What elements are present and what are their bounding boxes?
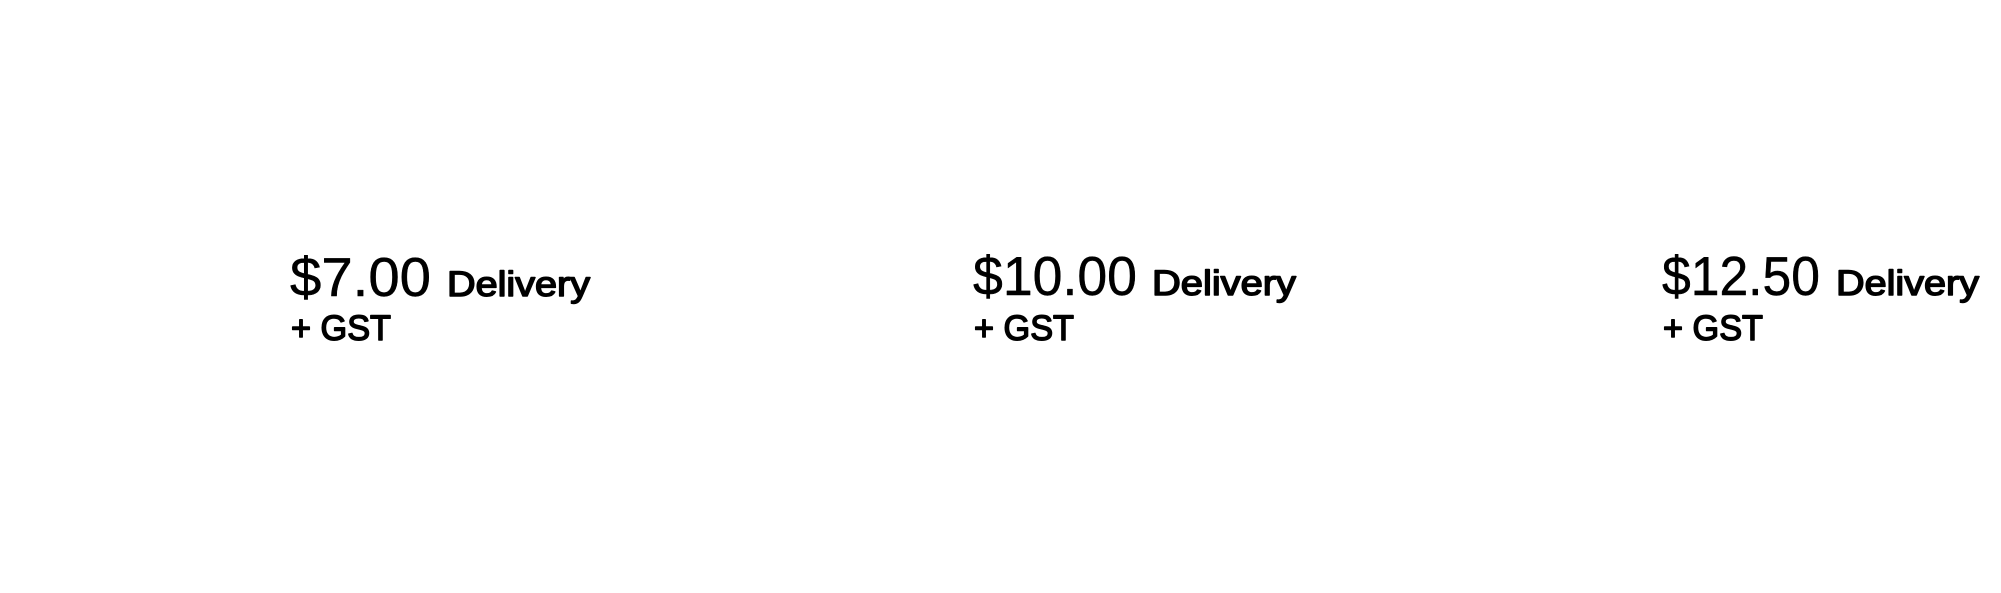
label: + GST: + GST xyxy=(974,309,1074,348)
label: + GST: + GST xyxy=(291,309,391,348)
price: $10.00: $10.00 xyxy=(973,245,1137,307)
label: Delivery: Delivery xyxy=(1152,264,1297,303)
panel: $12.50 delivery option xyxy=(1662,245,1980,348)
price: $12.50: $12.50 xyxy=(1662,245,1820,307)
label: + GST: + GST xyxy=(1663,309,1763,348)
label: Delivery: Delivery xyxy=(1836,264,1980,303)
panel: $10.00 delivery option xyxy=(973,245,1297,348)
label: Delivery: Delivery xyxy=(447,265,591,304)
panel: $7.00 delivery option xyxy=(290,246,591,348)
price: $7.00: $7.00 xyxy=(290,246,431,308)
